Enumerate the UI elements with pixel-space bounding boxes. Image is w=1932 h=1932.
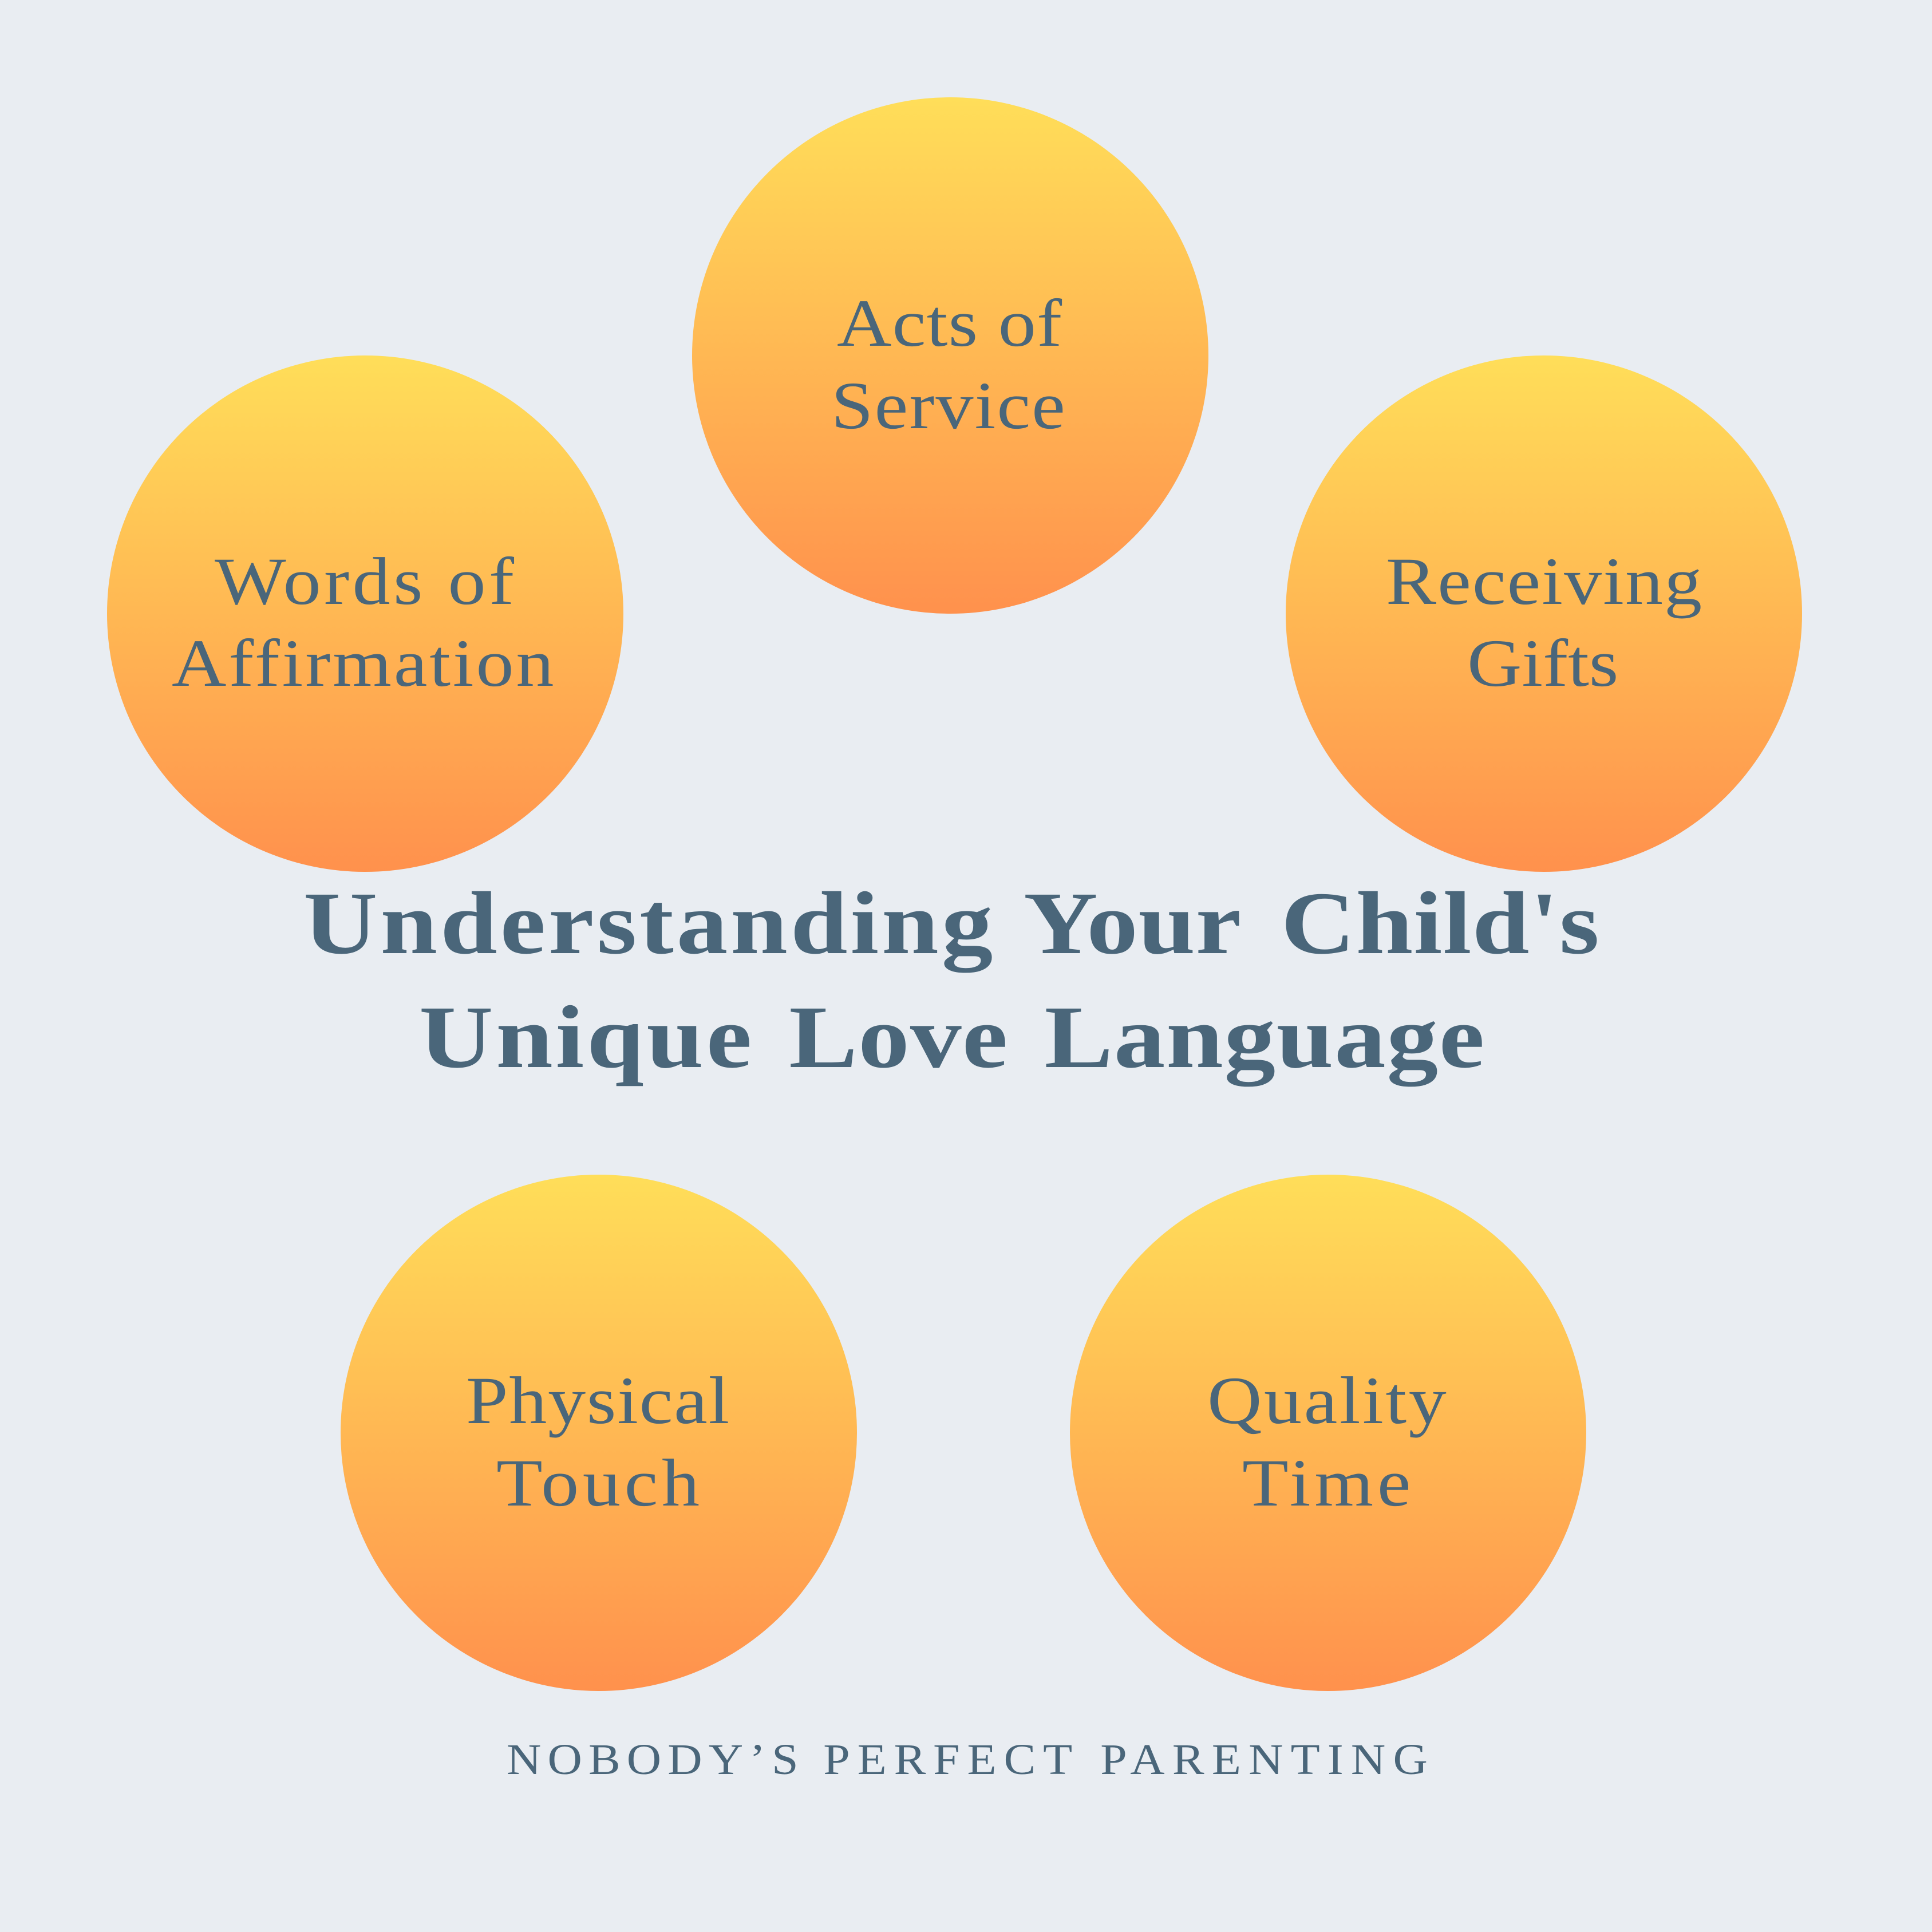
- footer brand name: PARENTING: [1100, 1736, 1435, 1784]
- circle: Words of Affirmation: [107, 355, 623, 872]
- title: Language: [1045, 988, 1485, 1086]
- circle: Quality Time: Quality: [1207, 1363, 1447, 1438]
- title: Child's: [1281, 874, 1600, 973]
- footer brand name: PERFECT: [823, 1736, 1098, 1784]
- circle: Words of Affirmation: Affirmation: [172, 626, 554, 701]
- circle: Words of Affirmation: Words of: [215, 544, 514, 619]
- circle: Acts of Service: Service: [831, 368, 1065, 443]
- footer brand name: NOBODY’S: [507, 1736, 823, 1784]
- circle: Receiving Gifts: Receiving: [1386, 544, 1702, 619]
- circle: Acts of Service: [692, 97, 1208, 614]
- circle: Physical Touch: Touch: [496, 1445, 700, 1520]
- circle: Quality Time: Time: [1242, 1445, 1411, 1520]
- circle: Physical Touch: [341, 1175, 857, 1691]
- title: [303, 874, 1600, 1086]
- title: Love: [789, 988, 1035, 1086]
- title: Unique: [419, 988, 783, 1086]
- circle: Acts of Service: Acts of: [837, 286, 1062, 361]
- circle: Receiving Gifts: Gifts: [1467, 626, 1618, 701]
- title: Understanding: [303, 874, 1024, 973]
- circle: Physical Touch: Physical: [466, 1363, 729, 1438]
- circle: Receiving Gifts: [1286, 355, 1802, 872]
- circle: Quality Time: [1070, 1175, 1586, 1691]
- title: Your: [1024, 874, 1266, 973]
